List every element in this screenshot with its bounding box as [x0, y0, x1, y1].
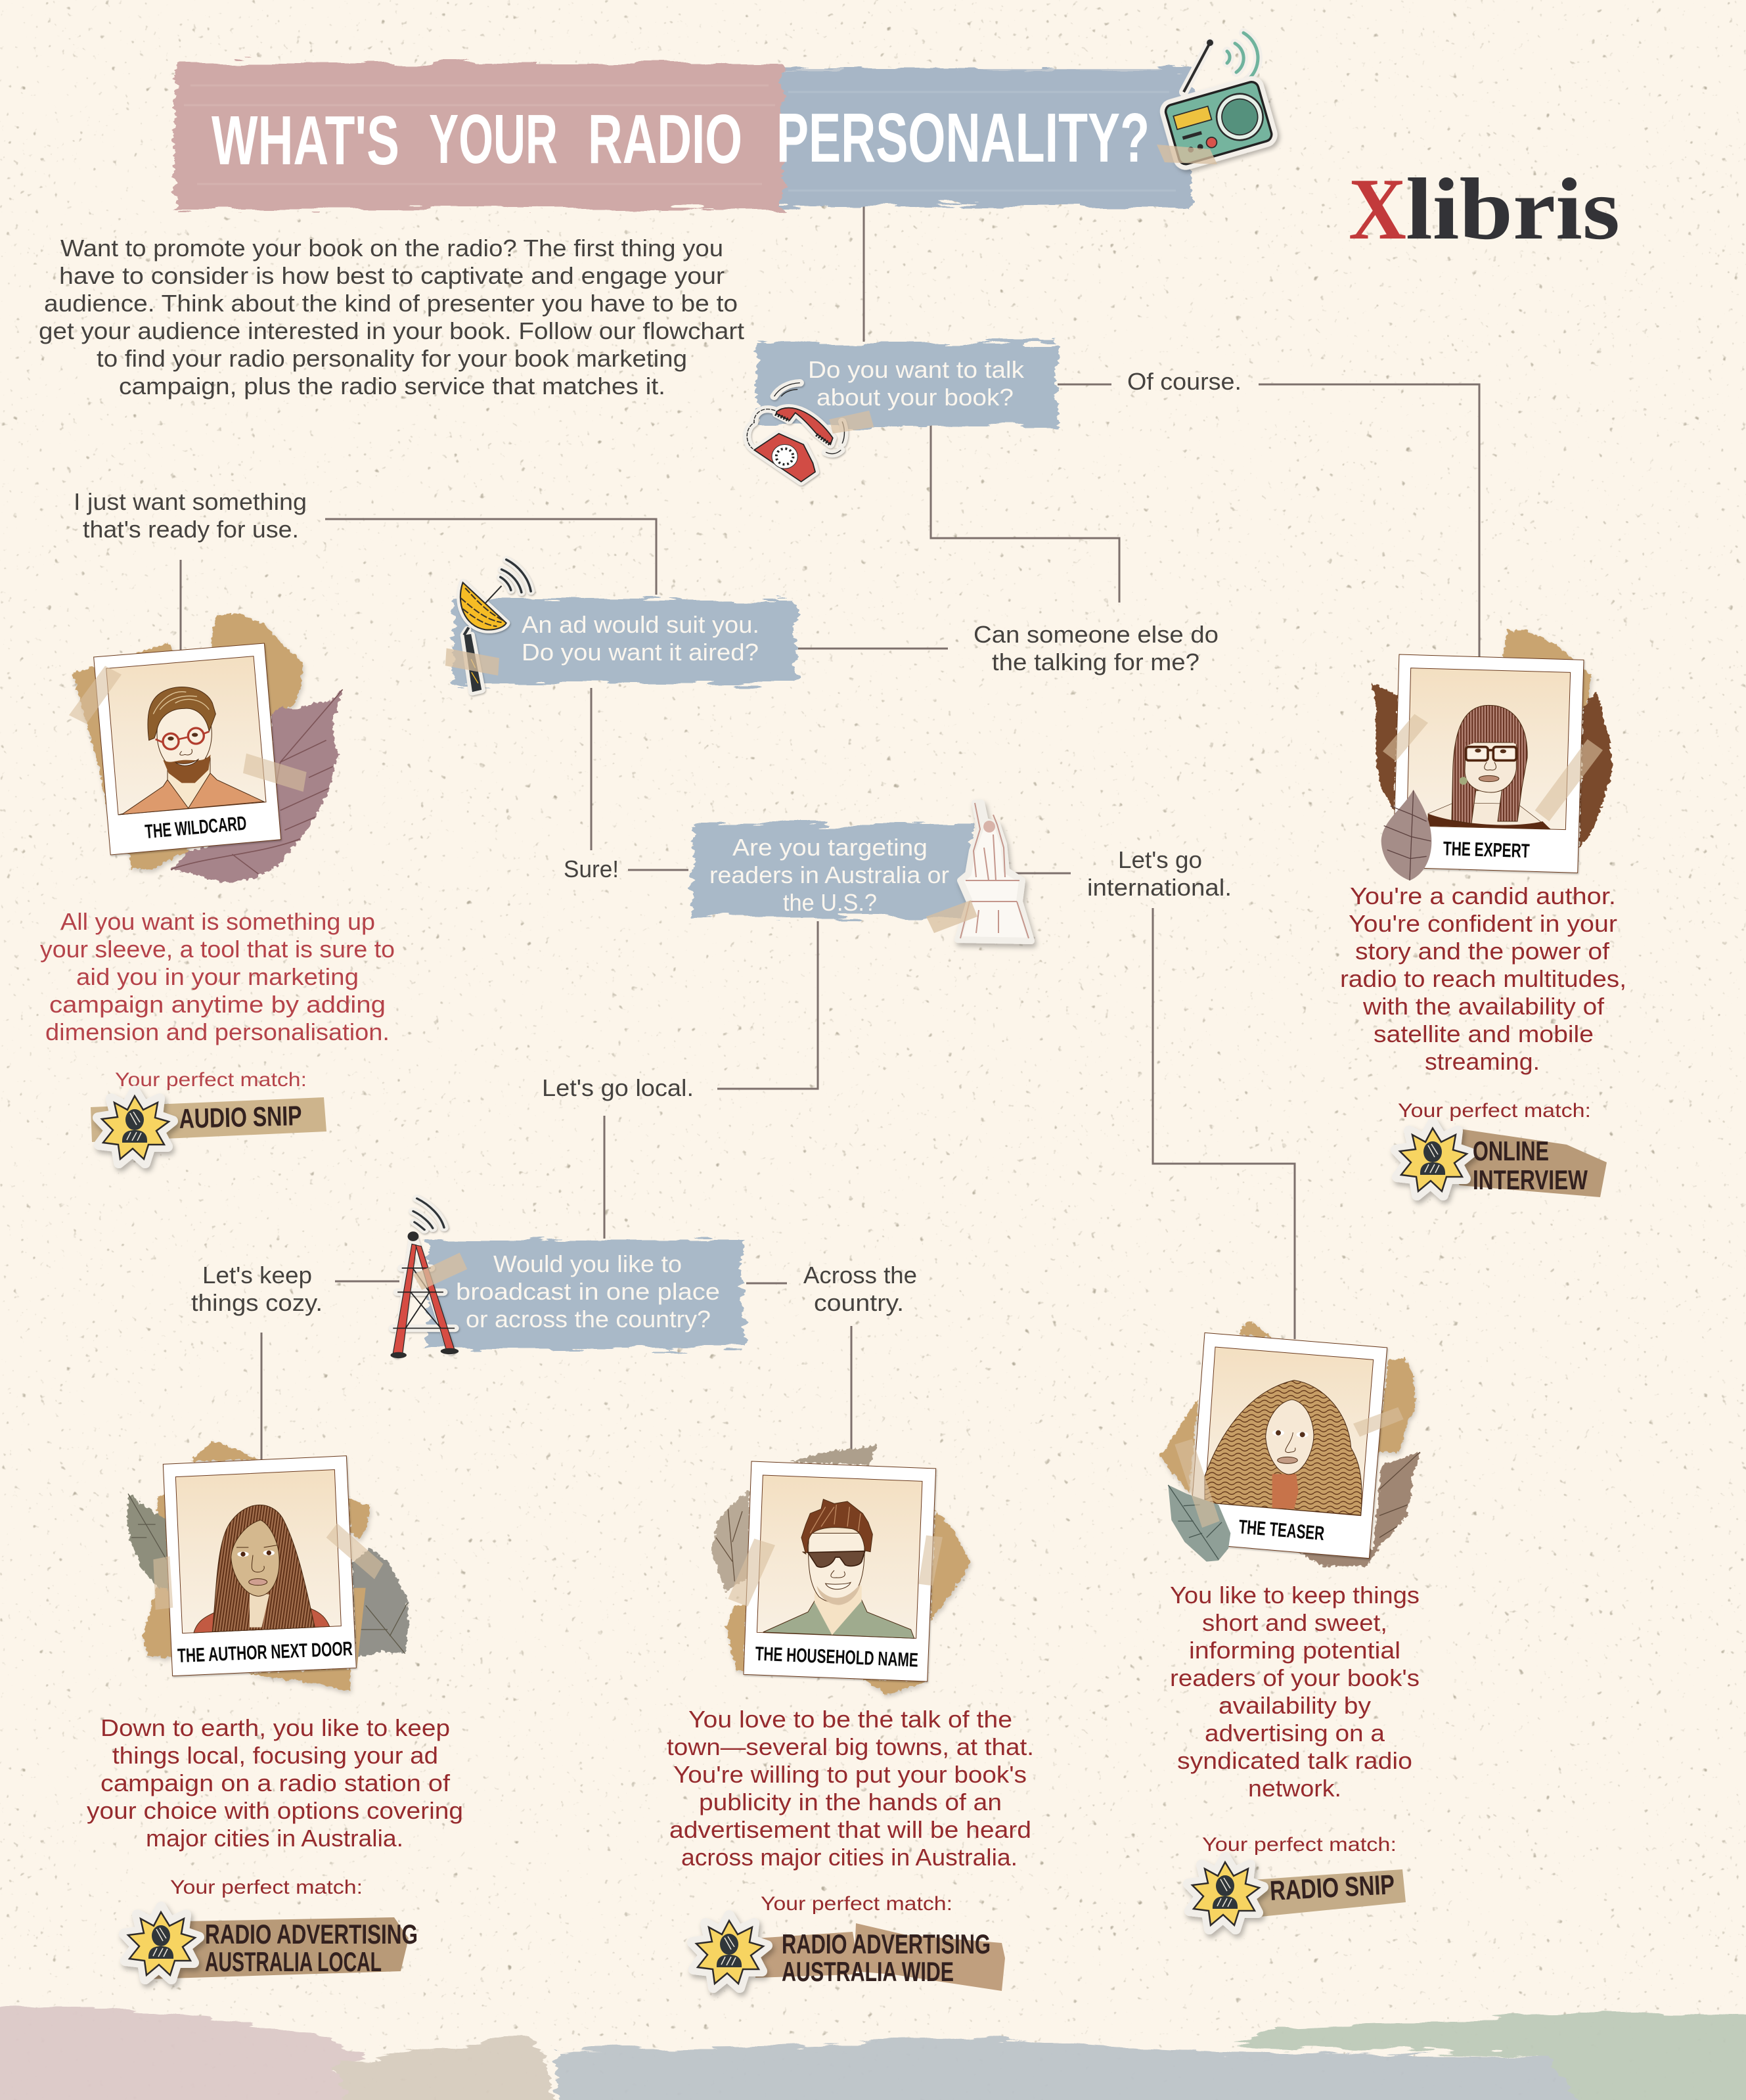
intro text: have to consider is how best to captivate and engage your: [59, 262, 725, 289]
answer: someone else: Can someone else do: [974, 621, 1219, 648]
question: broadcast: [427, 1241, 744, 1348]
description: expert: radio to reach multitudes,: [1340, 965, 1626, 992]
description: author next door: campaign on a radio station of: [101, 1769, 451, 1796]
question: talk about your book: about your book?: [817, 384, 1014, 411]
description: author next door: [87, 1714, 463, 1852]
title banner: [175, 63, 1192, 209]
answer: of course: Of course.: [1127, 368, 1242, 395]
description: author next door: your choice with options covering: [87, 1797, 463, 1824]
polaroid: the author next door: THE AUTHOR NEXT DOOR: [177, 1638, 353, 1667]
description: expert: You're confident in your: [1349, 910, 1617, 937]
question: broadcast: Would you like to: [493, 1250, 682, 1277]
polaroid: the household name: [711, 1446, 970, 1695]
answer: ready for use: [74, 488, 307, 543]
match: radio advertising australia local: AUSTRALIA LOCAL: [205, 1946, 382, 1977]
answer: across country: [803, 1262, 917, 1316]
answer: keep cozy: things cozy.: [191, 1289, 323, 1316]
panel: the wildcard: [40, 613, 395, 1163]
question: targeting readers: Are you targeting: [732, 834, 928, 861]
match: radio advertising australia local: Your perfect match:: [170, 1877, 363, 1898]
answer: ready for use: I just want something: [74, 488, 307, 515]
title text: [212, 99, 1150, 179]
description: expert: with the availability of: [1362, 993, 1605, 1020]
match: radio advertising australia wide: AUSTRALIA WIDE: [782, 1956, 954, 1987]
answer: someone else: [974, 621, 1219, 675]
icon: satellite dish: [445, 560, 531, 692]
answer: go international: [1087, 846, 1232, 901]
logo: Xlibris: X: [1349, 160, 1406, 258]
description: wildcard: your sleeve, a tool that is sure to: [40, 936, 395, 963]
title text: RADIO: [588, 101, 742, 178]
match: online interview: ONLINE: [1473, 1135, 1549, 1166]
panel: the expert: [1340, 629, 1626, 1197]
answer: ready for use: that's ready for use.: [83, 516, 299, 543]
question: targeting readers: [692, 824, 974, 917]
match: radio snip: [1188, 1834, 1406, 1929]
description: teaser: syndicated talk radio: [1177, 1747, 1412, 1774]
icon: radio tower: [390, 1198, 467, 1358]
description: expert: You're a candid author.: [1350, 882, 1616, 909]
description: household name: You're willing to put your book's: [673, 1761, 1027, 1788]
intro text: campaign, plus the radio service that matches it.: [119, 373, 665, 399]
match: radio snip: RADIO SNIP: [1269, 1869, 1395, 1906]
description: wildcard: aid you in your marketing: [76, 963, 359, 990]
description: expert: satellite and mobile: [1374, 1020, 1594, 1047]
match: radio advertising australia local: [124, 1877, 418, 1979]
title text: WHAT'S: [212, 102, 399, 179]
match: radio advertising australia wide: Your perfect match:: [761, 1893, 952, 1915]
polaroid: the household name: THE HOUSEHOLD NAME: [755, 1643, 919, 1672]
flowchart connector lines: [181, 189, 1479, 1462]
answer: sure: Sure!: [564, 856, 619, 882]
match: audio snip: [91, 1069, 326, 1163]
intro text: audience. Think about the kind of presenter you have to be to: [44, 290, 738, 317]
description: teaser: availability by: [1219, 1692, 1371, 1719]
description: household name: [667, 1706, 1034, 1871]
description: author next door: major cities in Australia.: [146, 1825, 403, 1852]
polaroid: the teaser: THE TEASER: [1238, 1516, 1326, 1545]
answer: across country: country.: [814, 1289, 904, 1316]
panel: the household name: [667, 1446, 1034, 1991]
intro text: to find your radio personality for your book marketing: [97, 345, 687, 372]
question: broadcast: or across the country?: [466, 1306, 711, 1333]
description: teaser: readers of your book's: [1170, 1664, 1420, 1691]
description: teaser: network.: [1248, 1775, 1341, 1802]
answer: go international: Let's go: [1118, 846, 1202, 873]
polaroid: the expert: THE EXPERT: [1443, 838, 1530, 862]
logo: Xlibris: libris: [1406, 160, 1620, 258]
description: teaser: [1170, 1582, 1420, 1802]
description: wildcard: [40, 908, 395, 1045]
answer: someone else: the talking for me?: [992, 649, 1199, 675]
description: expert: story and the power of: [1355, 938, 1610, 965]
icon: red telephone: [747, 383, 874, 482]
intro text: get your audience interested in your book. Follow our flowchart: [39, 317, 744, 344]
match: audio snip: Your perfect match:: [115, 1069, 307, 1091]
match: online interview: Your perfect match:: [1398, 1100, 1591, 1122]
description: wildcard: campaign anytime by adding: [49, 991, 386, 1018]
title text: PERSONALITY?: [776, 99, 1150, 177]
description: household name: publicity in the hands of an: [699, 1789, 1002, 1815]
match: radio advertising australia wide: RADIO ADVERTISING: [782, 1929, 991, 1959]
intro text: [39, 235, 744, 399]
description: author next door: things local, focusing your ad: [112, 1742, 438, 1769]
match: online interview: INTERVIEW: [1473, 1164, 1588, 1195]
description: household name: town—several big towns, at that.: [667, 1733, 1034, 1760]
answer: keep cozy: [191, 1262, 323, 1316]
question: ad aired: An ad would suit you.: [522, 611, 759, 638]
description: expert: streaming.: [1425, 1048, 1540, 1075]
match: online interview: [1396, 1100, 1607, 1197]
polaroid: the expert: [1372, 629, 1613, 880]
description: household name: advertisement that will be heard: [669, 1816, 1031, 1843]
question: targeting readers: readers in Australia or: [709, 861, 949, 888]
panel: the author next door: [87, 1441, 463, 1979]
match: radio snip: Your perfect match:: [1202, 1834, 1397, 1856]
match: radio advertising australia wide: [692, 1893, 1005, 1991]
answer: go international: international.: [1087, 874, 1232, 901]
polaroid: the teaser: [1159, 1322, 1420, 1566]
description: teaser: informing potential: [1189, 1637, 1400, 1664]
answer: across country: Across the: [803, 1262, 917, 1289]
icon: radio: [1157, 33, 1273, 166]
question: ad aired: Do you want it aired?: [522, 639, 759, 666]
polaroid: the wildcard: THE WILDCARD: [144, 813, 248, 843]
question: targeting readers: the U.S.?: [783, 889, 877, 916]
description: household name: across major cities in Australia.: [681, 1844, 1018, 1871]
description: teaser: You like to keep things: [1170, 1582, 1420, 1609]
description: author next door: Down to earth, you like to keep: [101, 1714, 450, 1741]
intro text: Want to promote your book on the radio? The first thing you: [60, 235, 723, 262]
match: audio snip: AUDIO SNIP: [179, 1100, 302, 1134]
question: ad aired: [453, 599, 796, 683]
title text: YOUR: [429, 101, 558, 178]
answer: keep cozy: Let's keep: [202, 1262, 312, 1289]
polaroid: the wildcard: [69, 613, 343, 883]
polaroid: the author next door: [127, 1441, 409, 1691]
question: talk about your book: Do you want to talk: [808, 356, 1025, 383]
match: radio advertising australia local: RADIO ADVERTISING: [205, 1919, 418, 1950]
description: wildcard: dimension and personalisation.: [45, 1018, 390, 1045]
description: household name: You love to be the talk of the: [688, 1706, 1012, 1733]
question: broadcast: broadcast in one place: [456, 1278, 720, 1305]
description: wildcard: All you want is something up: [60, 908, 375, 935]
panel: the teaser: [1159, 1322, 1420, 1929]
question: talk about your book: [757, 343, 1056, 426]
description: teaser: advertising on a: [1205, 1720, 1385, 1746]
description: expert: [1340, 882, 1626, 1075]
footer brush strokes: [0, 2005, 1746, 2100]
icon: statue of liberty: [926, 803, 1031, 941]
description: teaser: short and sweet,: [1202, 1609, 1387, 1636]
answer: go local: Let's go local.: [542, 1074, 694, 1101]
